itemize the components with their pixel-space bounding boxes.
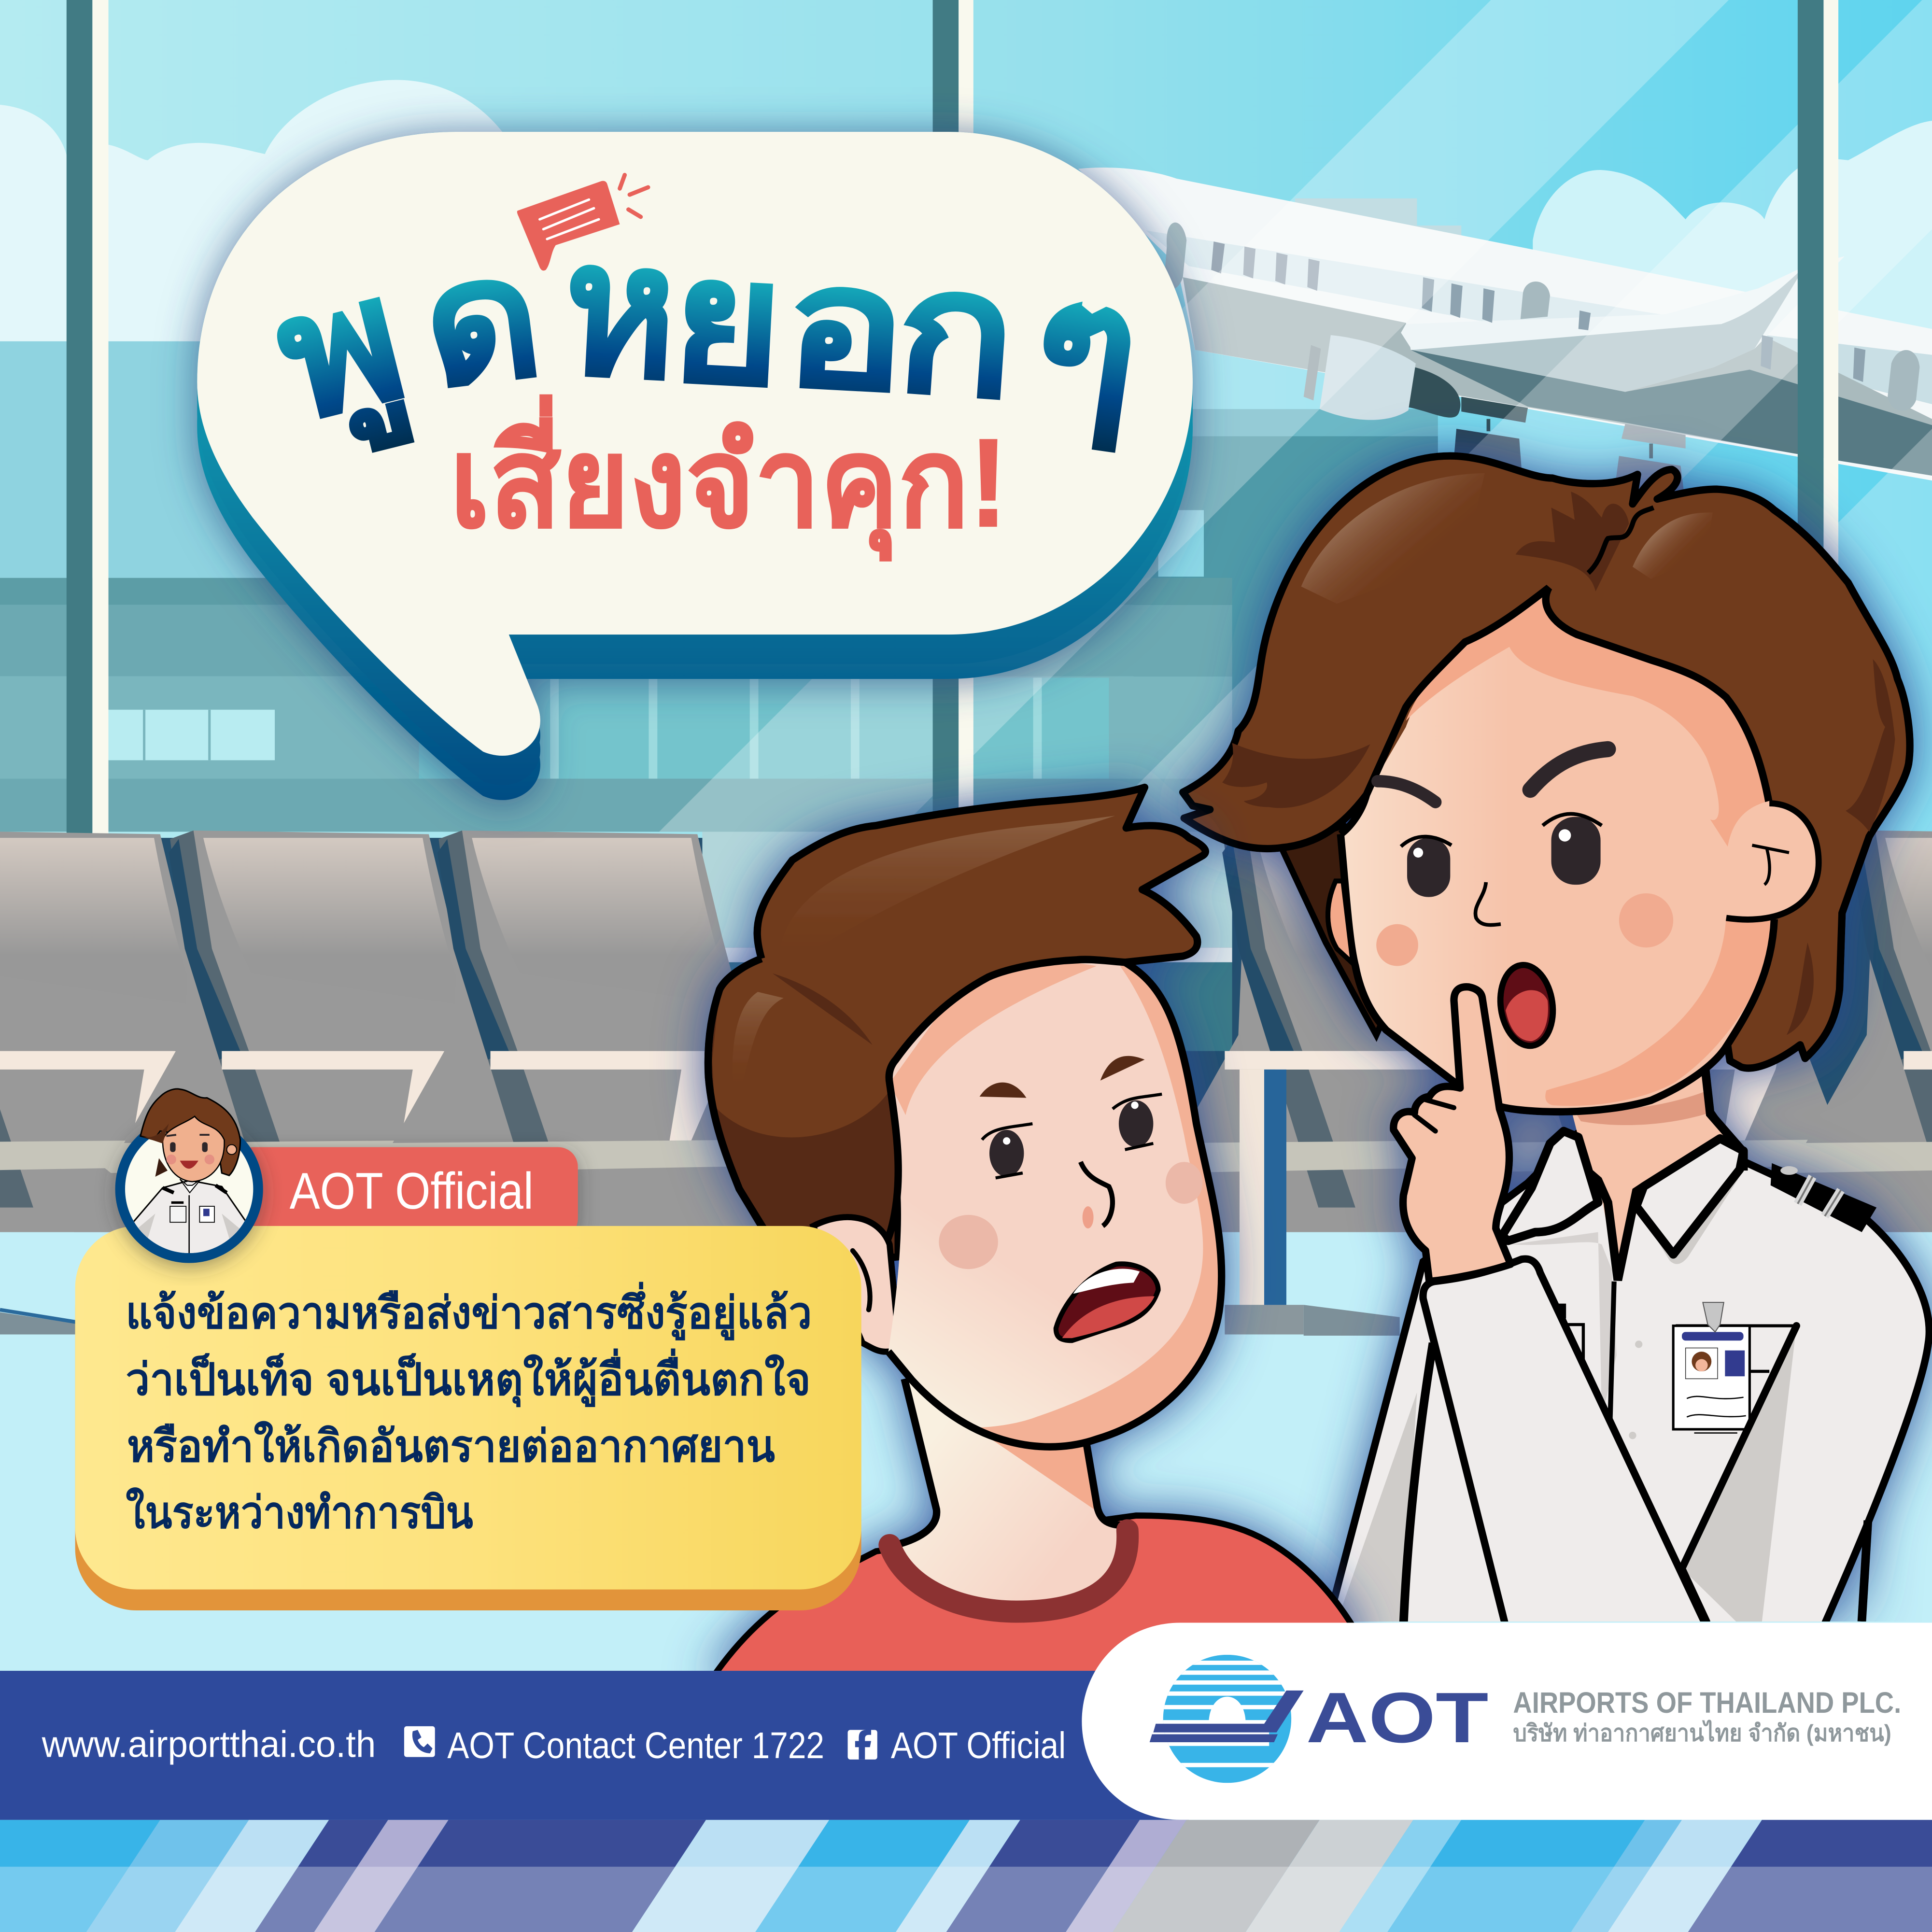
woman ID card: [1673, 1302, 1749, 1433]
icon: phone: [404, 1726, 435, 1757]
woman eyebrows: [1530, 749, 1608, 790]
woman hair details: [1222, 743, 1370, 808]
description text: ว่าเป็นเท็จ จนเป็นเหตุให้ผู้อื่นตื่นตกใจ: [126, 1348, 811, 1407]
footer band: [0, 1671, 1189, 1820]
character: woman officer: [1183, 456, 1929, 1626]
woman hair: [1183, 456, 1910, 1068]
title line 1: ห: [559, 203, 683, 417]
woman neck: [1565, 1058, 1744, 1280]
title line 1: อ: [780, 228, 912, 426]
logo panel: [1082, 1623, 1932, 1820]
engine: [1405, 367, 1461, 418]
distant tower: [1295, 198, 1461, 296]
woman epaulette: [1771, 1163, 1876, 1232]
speech bubble: [197, 132, 1193, 800]
yellow description card: [75, 1226, 861, 1610]
description text: หรือทำให้เกิดอันตรายต่ออากาศยาน: [127, 1421, 775, 1471]
left cloud: [0, 80, 505, 345]
man shirt: [712, 1516, 1353, 1678]
bench leg: [1225, 1051, 1373, 1334]
man neck: [889, 1379, 1128, 1612]
title line 1: ย: [667, 221, 788, 422]
man hair outline: [708, 788, 1205, 1241]
man eyebrows: [980, 1056, 1144, 1098]
avatar badge: [120, 1089, 258, 1269]
man nose: [1081, 1162, 1113, 1226]
woman body: [1327, 1115, 1929, 1626]
AOT wordmark: AOT: [1306, 1678, 1488, 1758]
company name thai: บริษัท ท่าอากาศยานไทย จำกัด (มหาชน): [1513, 1719, 1891, 1746]
woman left ear: [1328, 881, 1353, 963]
woman face: [1340, 589, 1774, 1112]
waiting seats: [0, 831, 1932, 1232]
woman nose: [1475, 882, 1501, 925]
woman mouth: [1495, 961, 1558, 1049]
woman shirt pocket and shading: [1567, 1325, 1796, 1392]
woman back hair: [1282, 826, 1454, 1035]
woman collar: [1502, 1131, 1744, 1255]
window columns: [67, 0, 1823, 838]
man hair top: [712, 788, 1205, 1138]
contact center: AOT Contact Center 1722: [447, 1725, 824, 1766]
title line 1: ก: [891, 232, 1022, 435]
title line 1: ด: [413, 218, 551, 423]
airplane: [1078, 168, 1932, 505]
character: man: [708, 788, 1353, 1678]
man blush: [939, 1215, 998, 1269]
facebook name: AOT Official: [891, 1725, 1066, 1766]
description text: [126, 1282, 812, 1537]
woman left sleeve: [1423, 1259, 1706, 1626]
terminal building: [0, 341, 1146, 578]
man collar: [889, 1530, 1128, 1612]
right cloud: [1533, 121, 1932, 444]
glass reflections: [659, 0, 1932, 832]
AOT logo mark: [1146, 1655, 1304, 1783]
landing gear: [1461, 397, 1528, 423]
label text: AOT Official: [290, 1162, 534, 1220]
man ear: [813, 1217, 900, 1352]
man face: [888, 949, 1222, 1447]
waiting lounge floor: [0, 838, 1932, 1226]
title line 1: [259, 203, 1154, 468]
woman right ear: [1725, 801, 1819, 922]
website: www.airportthai.co.th: [42, 1724, 376, 1765]
man eyes: [989, 1130, 1024, 1177]
footer stripes: [0, 1820, 1932, 1932]
woman hand: [1394, 987, 1510, 1282]
title line 1: พู: [259, 239, 424, 468]
description text: แจ้งข้อความหรือส่งข่าวสารซึ่งรู้อยู่แล้ว: [126, 1282, 812, 1341]
description text: ในระหว่างทำการบิน: [126, 1487, 473, 1537]
man mouth: [1056, 1264, 1158, 1340]
woman collar shadow: [1645, 1164, 1745, 1264]
icon: message: [517, 175, 648, 271]
title line 2: เสี่ยงจำคุก!: [450, 395, 1008, 562]
icon: facebook: [848, 1730, 877, 1760]
man back hair: [708, 959, 898, 1269]
red name label: [234, 1147, 578, 1238]
woman eyes: [1407, 838, 1450, 897]
woman blush: [1619, 893, 1673, 947]
title line 1: ๆ: [1020, 240, 1154, 456]
fuselage windows and doors: [1164, 223, 1186, 289]
woman right arm line: [1682, 1326, 1796, 1622]
